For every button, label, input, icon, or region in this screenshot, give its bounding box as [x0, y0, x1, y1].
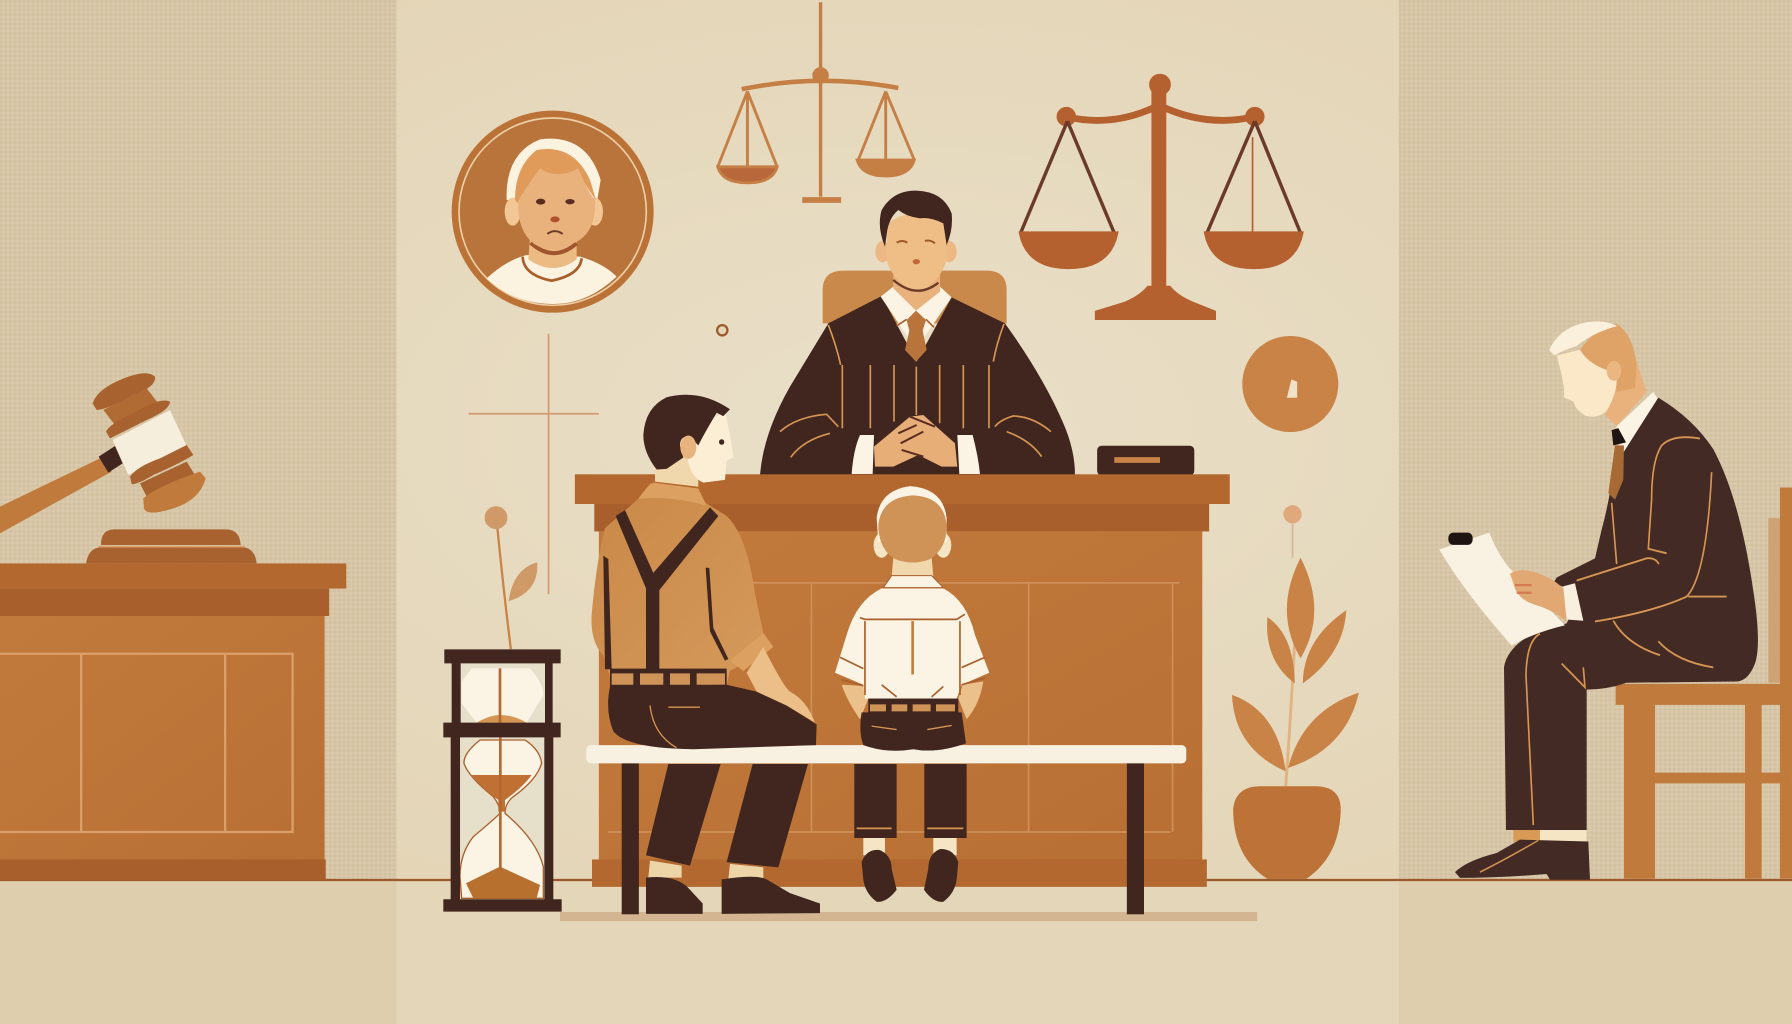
small scale	[718, 2, 914, 200]
bench shadow	[560, 912, 1257, 921]
man shoes	[646, 877, 820, 914]
judge neck	[893, 275, 940, 311]
background: right panel	[1399, 0, 1792, 880]
boy shorts	[860, 712, 966, 751]
boy shirt	[835, 588, 989, 699]
shoe	[1455, 840, 1590, 880]
judge chair	[823, 271, 1007, 323]
judge robe	[760, 296, 1075, 475]
man lower legs	[646, 764, 808, 867]
man belt	[610, 669, 727, 687]
boy seated on bench	[835, 486, 989, 902]
large scale	[1021, 75, 1302, 320]
floor: right	[1399, 880, 1792, 1024]
man shirt	[591, 483, 773, 685]
boy belt	[868, 699, 958, 713]
man cuff	[730, 633, 773, 671]
man seated on bench	[591, 395, 820, 914]
portrait medallion of child	[452, 111, 654, 313]
paper	[1439, 533, 1565, 646]
judge desk	[575, 474, 1230, 887]
bench	[586, 745, 1186, 914]
judge	[760, 191, 1075, 475]
boy head	[874, 533, 890, 558]
boy arms	[842, 681, 983, 719]
man pants	[608, 685, 817, 749]
hand	[1510, 570, 1567, 621]
small ornament	[717, 325, 727, 335]
seated man with paper	[1439, 321, 1792, 880]
floor line	[0, 879, 1792, 881]
man suspenders	[603, 507, 728, 669]
device on desk	[1097, 446, 1194, 475]
chair	[1768, 518, 1781, 683]
cuff	[1563, 583, 1583, 621]
left podium	[0, 563, 346, 880]
floor: left	[0, 880, 397, 1024]
man hair	[643, 395, 730, 470]
judge shirt	[881, 287, 952, 349]
suit seams	[1526, 437, 1727, 825]
man neck	[655, 454, 698, 487]
judge hands	[874, 415, 957, 467]
tie	[1608, 428, 1626, 500]
hourglass	[443, 649, 562, 912]
neck	[1605, 361, 1647, 426]
judge head	[875, 241, 890, 262]
potted plant	[1232, 505, 1359, 879]
judge tie	[905, 311, 927, 362]
background: left panel	[0, 0, 397, 880]
plant sprig behind hourglass	[485, 506, 537, 649]
shirt	[1617, 392, 1658, 476]
boy legs	[854, 764, 967, 838]
suit	[1504, 398, 1758, 830]
boy shoes	[862, 849, 958, 902]
gavel sound block	[86, 529, 257, 563]
man face	[685, 411, 733, 483]
boy neck and collar	[892, 557, 933, 576]
robe stripes	[780, 324, 1051, 457]
socks	[1513, 830, 1540, 842]
man forearm	[747, 647, 815, 723]
head	[1580, 324, 1637, 392]
floor: centre	[397, 880, 1399, 1024]
judge cuffs	[852, 435, 980, 474]
clock circle	[1242, 336, 1338, 432]
gavel	[0, 373, 206, 533]
faint cross line	[469, 334, 599, 594]
